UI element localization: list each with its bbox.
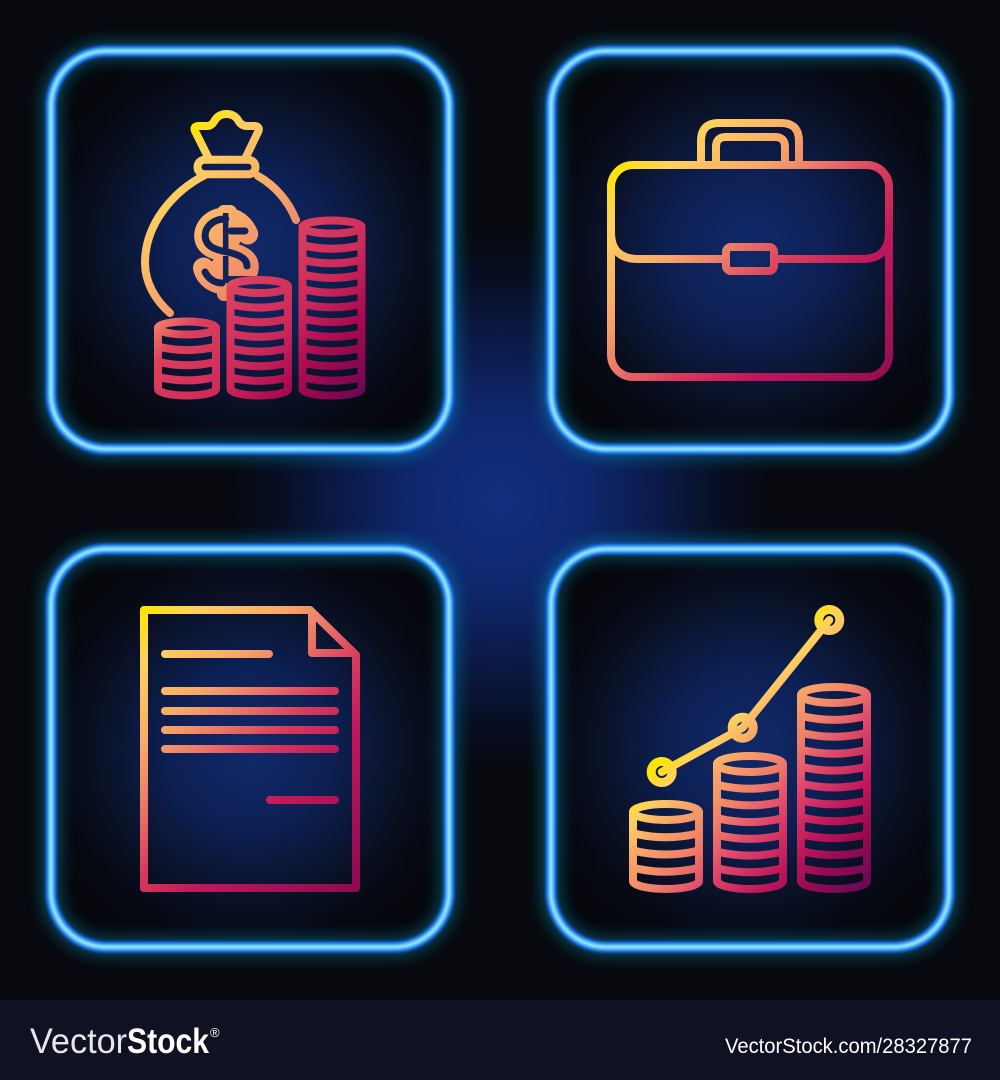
central blue glow (230, 230, 770, 770)
panel frame: bottom right (551, 549, 949, 947)
panel: document (51, 549, 449, 947)
panel frame: bottom left (51, 549, 449, 947)
logo: VectorStock (30, 1022, 220, 1061)
icon: small coin stack (633, 804, 699, 889)
icon: briefcase flap line (611, 232, 889, 259)
icon: bag neck (198, 160, 256, 174)
icon: text lines (165, 654, 335, 800)
icon: document (144, 610, 356, 888)
panel: money bag and coins (51, 51, 449, 449)
icon: briefcase body (611, 165, 889, 377)
icon: briefcase clasp (726, 247, 774, 271)
icon: tall coin stack (801, 687, 867, 889)
icon: small coin stack (158, 322, 216, 396)
footer bar (0, 1000, 1000, 1080)
icon: folded corner (312, 611, 356, 653)
panel: briefcase (551, 51, 949, 449)
icon: coin growth chart (633, 610, 867, 889)
image id text: VectorStock.com/28327877 (725, 1035, 972, 1058)
icon: briefcase handle (701, 123, 799, 165)
icon: bag body (145, 175, 296, 313)
icon: money bag with coin stacks (145, 114, 362, 396)
icon: page outline (144, 610, 356, 888)
panel: growth chart (551, 549, 949, 947)
icon: bag top knot (194, 114, 259, 157)
icon: dollar sign (204, 212, 248, 294)
logo: VectorStock: Stock (127, 1022, 209, 1061)
panel frame: top left (51, 51, 449, 449)
logo: VectorStock: Vector (30, 1022, 127, 1061)
icon: tall coin stack (302, 220, 362, 396)
icon: medium coin stack (717, 756, 783, 889)
icon: trend line with points (651, 610, 840, 782)
icon: medium coin stack (230, 280, 288, 396)
icon: briefcase (611, 123, 889, 377)
panel frame: top right (551, 51, 949, 449)
logo: VectorStock: ® (210, 1025, 220, 1040)
